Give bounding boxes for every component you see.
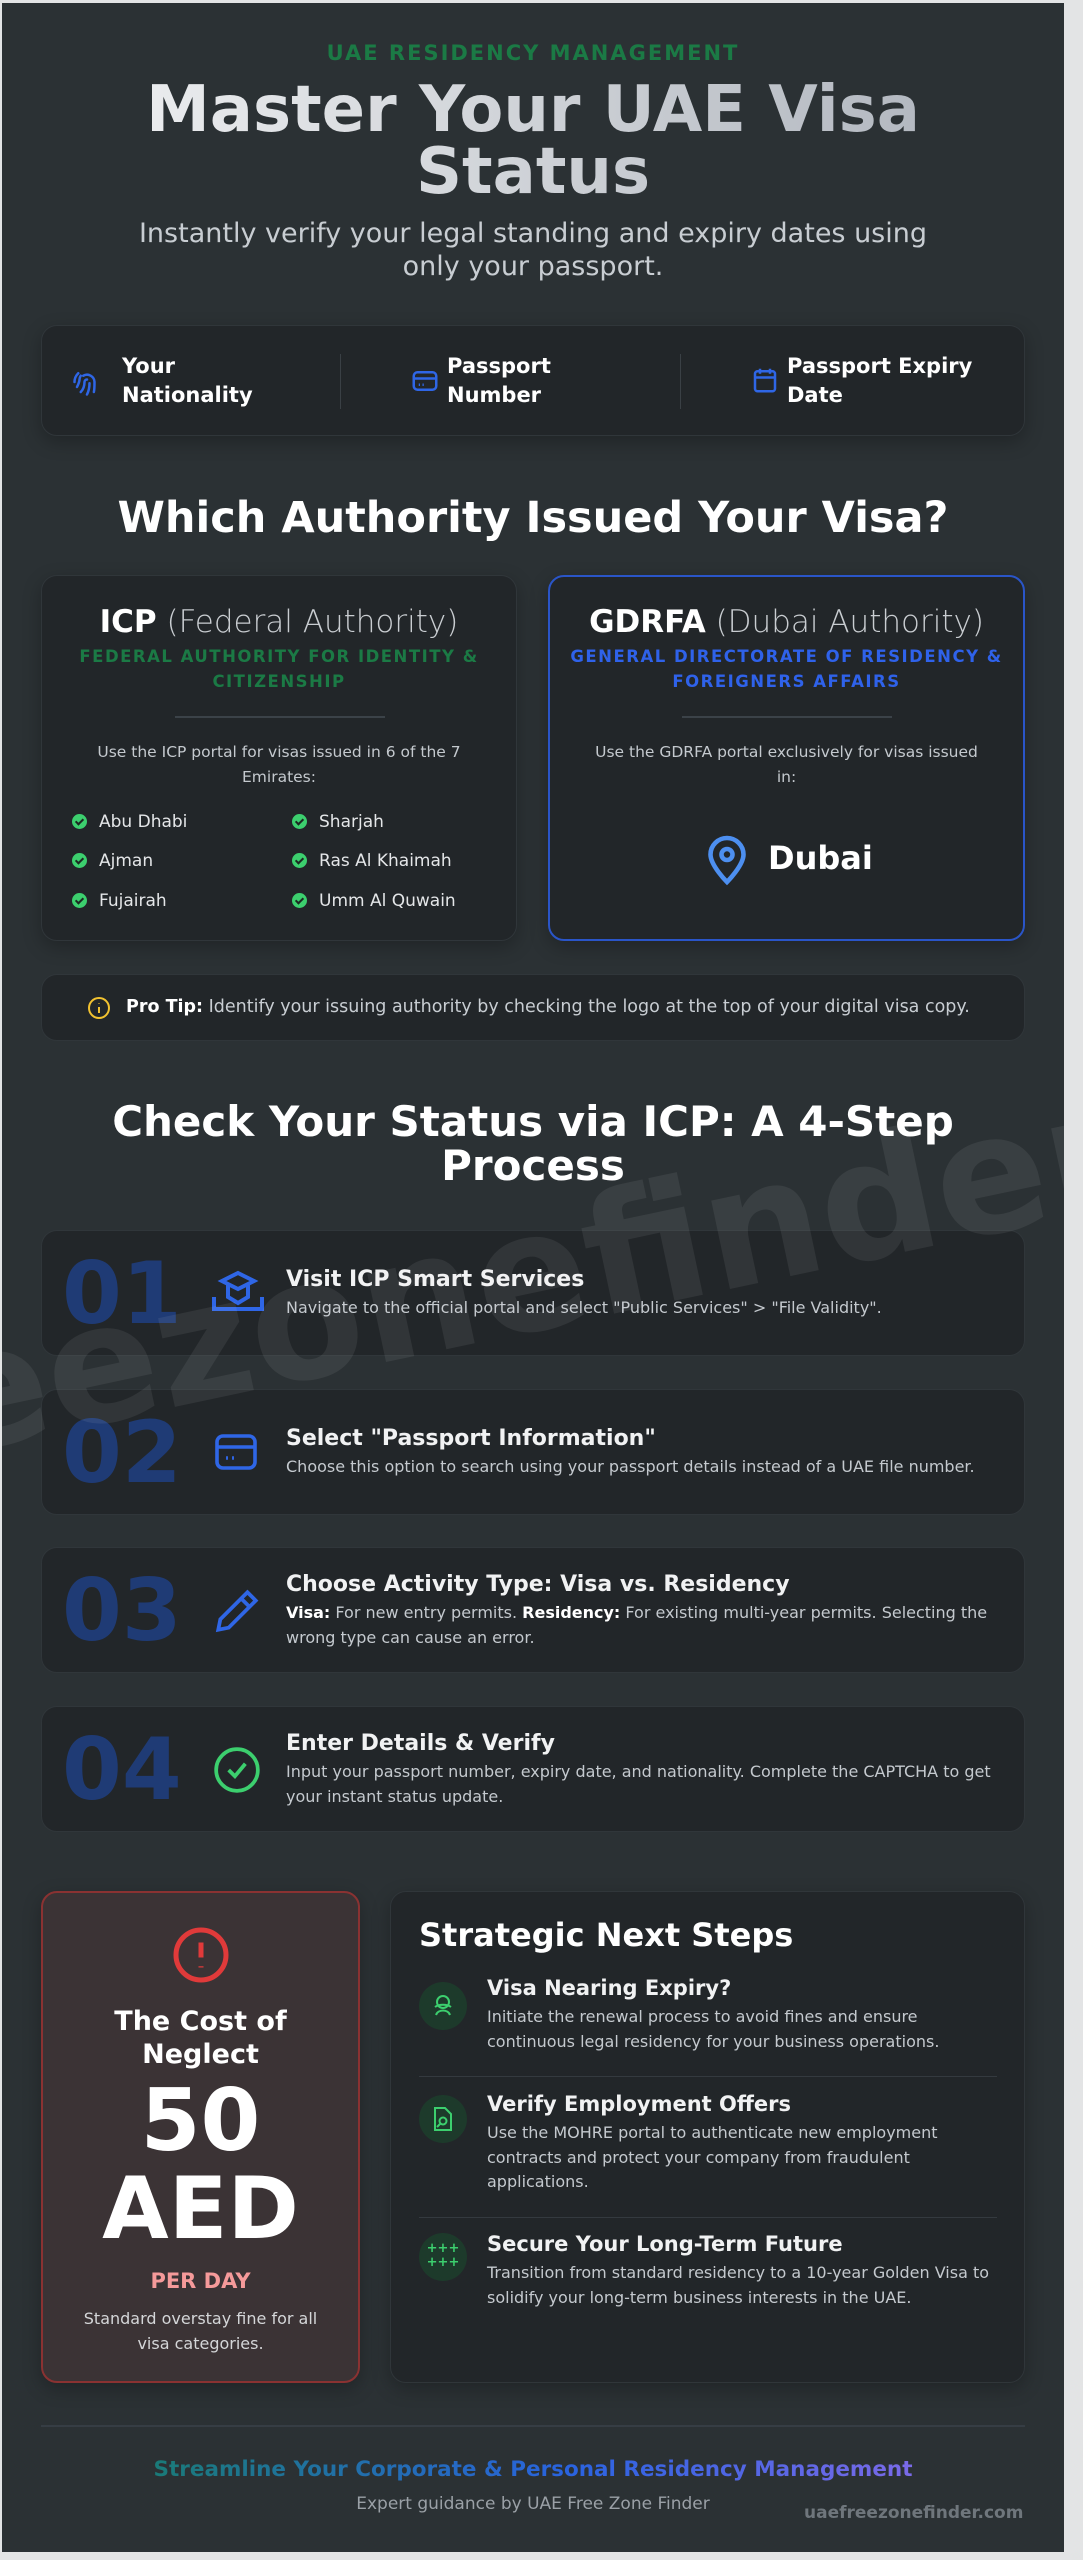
step 4: [41, 1706, 1025, 1832]
eyebrow: UAE residency management: UAE RESIDENCY MANAGEMENT: [327, 41, 739, 65]
step 1: Navigate to the official portal and select "Public Services" > "File Validity".: [286, 1298, 882, 1317]
icon: [419, 1982, 467, 2030]
item: long-term future: Transition from standard residency to a 10-year Golden Visa to solidify your long-term business interests in the UAE.: [487, 2263, 989, 2306]
icon: info: [88, 997, 110, 1019]
panel: cost of neglect: Standard overstay fine for all visa categories.: [84, 2309, 317, 2353]
step 2: 02: [62, 1403, 182, 1503]
step 2: Choose this option to search using your passport details instead of a UAE file number.: [286, 1457, 975, 1476]
step 3: 03: [62, 1561, 182, 1661]
step 3: Choose Activity Type: Visa vs. Residency: [286, 1572, 790, 1597]
emirates list: Ajman: [99, 851, 153, 871]
stat: 50 AED: AED: [102, 2159, 299, 2259]
pro tip: [41, 974, 1025, 1041]
icon: calendar: [754, 368, 776, 392]
item: visa nearing expiry: Initiate the renewal process to avoid fines and ensure continuous legal residency for your business operations.: [487, 2007, 939, 2050]
emirates list: Abu Dhabi: [99, 812, 187, 832]
item: expiry date: Date: [787, 383, 843, 407]
item: nationality: [73, 354, 253, 407]
footer tagline: Streamline Your Corporate & Personal Residency Management: [154, 2457, 912, 2482]
step 2: Select "Passport Information": [286, 1426, 656, 1451]
item: passport number: [412, 354, 551, 407]
step 4: Input your passport number, expiry date, and nationality. Complete the CAPTCHA to get your instant status update.: [286, 1762, 991, 1806]
panel: strategic next steps: Strategic Next Steps: [419, 1916, 793, 1954]
item: expiry date: [754, 354, 972, 407]
panel: cost of neglect: The Cost of: [114, 2006, 287, 2037]
GDRFA description: Use the GDRFA portal exclusively for visas issued in:: [595, 743, 978, 786]
step 1: 01: [62, 1244, 182, 1344]
item: verify employment: [419, 2092, 938, 2191]
icon: graduation: [212, 1270, 264, 1311]
step 3: Visa: For new entry permits. Residency: For existing multi-year permits. Selecting the wrong type can cause an error.: [286, 1603, 987, 1647]
step 1: [41, 1230, 1025, 1356]
icon: alert: [174, 1928, 228, 1982]
ICP subtitle: FEDERAL AUTHORITY FOR IDENTITY & CITIZENSHIP: [79, 647, 479, 691]
subtitle: Instantly verify your legal standing and expiry dates using only your passport.: [139, 218, 927, 282]
GDRFA subtitle: GENERAL DIRECTORATE OF RESIDENCY & FOREIGNERS AFFAIRS: [570, 647, 1003, 691]
GDRFA title: GDRFA (Dubai Authority): [589, 604, 984, 640]
panel: cost of neglect: Neglect: [142, 2039, 259, 2070]
emirates list: Umm Al Quwain: [319, 891, 456, 911]
icon: fingerprint: [73, 372, 96, 396]
step 1: Visit ICP Smart Services: [286, 1267, 584, 1292]
step 4: Enter Details & Verify: [286, 1731, 555, 1756]
ICP description: Use the ICP portal for visas issued in 6 of the 7 Emirates:: [97, 743, 461, 786]
emirates list: [72, 812, 456, 911]
icon: pin: [708, 836, 746, 886]
item: nationality: Your: [122, 354, 175, 378]
step 2: [41, 1389, 1025, 1515]
item: nationality: Nationality: [122, 383, 253, 407]
step 4: 04: [62, 1720, 182, 1820]
panel: strategic next steps: [390, 1891, 1025, 2383]
Dubai location: [708, 836, 873, 886]
ICP title: ICP (Federal Authority): [100, 604, 458, 640]
item: long-term future: +++: [427, 2241, 459, 2256]
emirates list: Fujairah: [99, 891, 167, 911]
emirates list: Ras Al Khaimah: [319, 851, 452, 871]
panel: ICP: [41, 575, 517, 941]
heading: which authority: Which Authority Issued Your Visa?: [117, 493, 948, 543]
input requirements bar: [41, 325, 1025, 436]
item: verify employment: Verify Employment Offers: [487, 2092, 791, 2116]
icon: check circle: [214, 1747, 260, 1793]
item: visa nearing expiry: Visa Nearing Expiry?: [487, 1976, 731, 2000]
panel: cost of neglect: [41, 1891, 360, 2383]
item: long-term future: [419, 2232, 989, 2306]
stat: 50 AED: [102, 2071, 299, 2259]
step 3: [41, 1547, 1025, 1673]
item: passport number: Number: [447, 383, 541, 407]
Dubai location: Dubai: [768, 839, 873, 877]
item: passport number: Passport: [447, 354, 551, 378]
icon: card: [412, 371, 438, 391]
item: visa nearing expiry: [419, 1976, 939, 2050]
pro tip: Pro Tip: Identify your issuing authority by checking the logo at the top of your digital visa copy.: [126, 997, 970, 1017]
panel: cost of neglect: PER DAY: [150, 2269, 251, 2293]
item: verify employment: Use the MOHRE portal to authenticate new employment contracts and protect your company from fraudulent applications.: [487, 2123, 938, 2191]
item: expiry date: Passport Expiry: [787, 354, 972, 378]
icon: card: [215, 1434, 257, 1470]
footer credit: Expert guidance by UAE Free Zone Finder: [356, 2494, 710, 2514]
stat: 50 AED: 50: [141, 2071, 260, 2171]
title: [2, 79, 1064, 203]
panel: GDRFA: [548, 575, 1025, 941]
heading: 4-step process: Check Your Status via ICP: A 4-Step Process: [112, 1097, 954, 1190]
icon: pencil: [216, 1590, 258, 1632]
item: long-term future: +++: [427, 2255, 459, 2270]
footer url: uaefreezonefinder.com: [804, 2503, 1023, 2523]
title: Master Your UAE Visa Status: [146, 73, 920, 209]
item: long-term future: Secure Your Long-Term Future: [487, 2232, 843, 2256]
emirates list: Sharjah: [319, 812, 384, 832]
